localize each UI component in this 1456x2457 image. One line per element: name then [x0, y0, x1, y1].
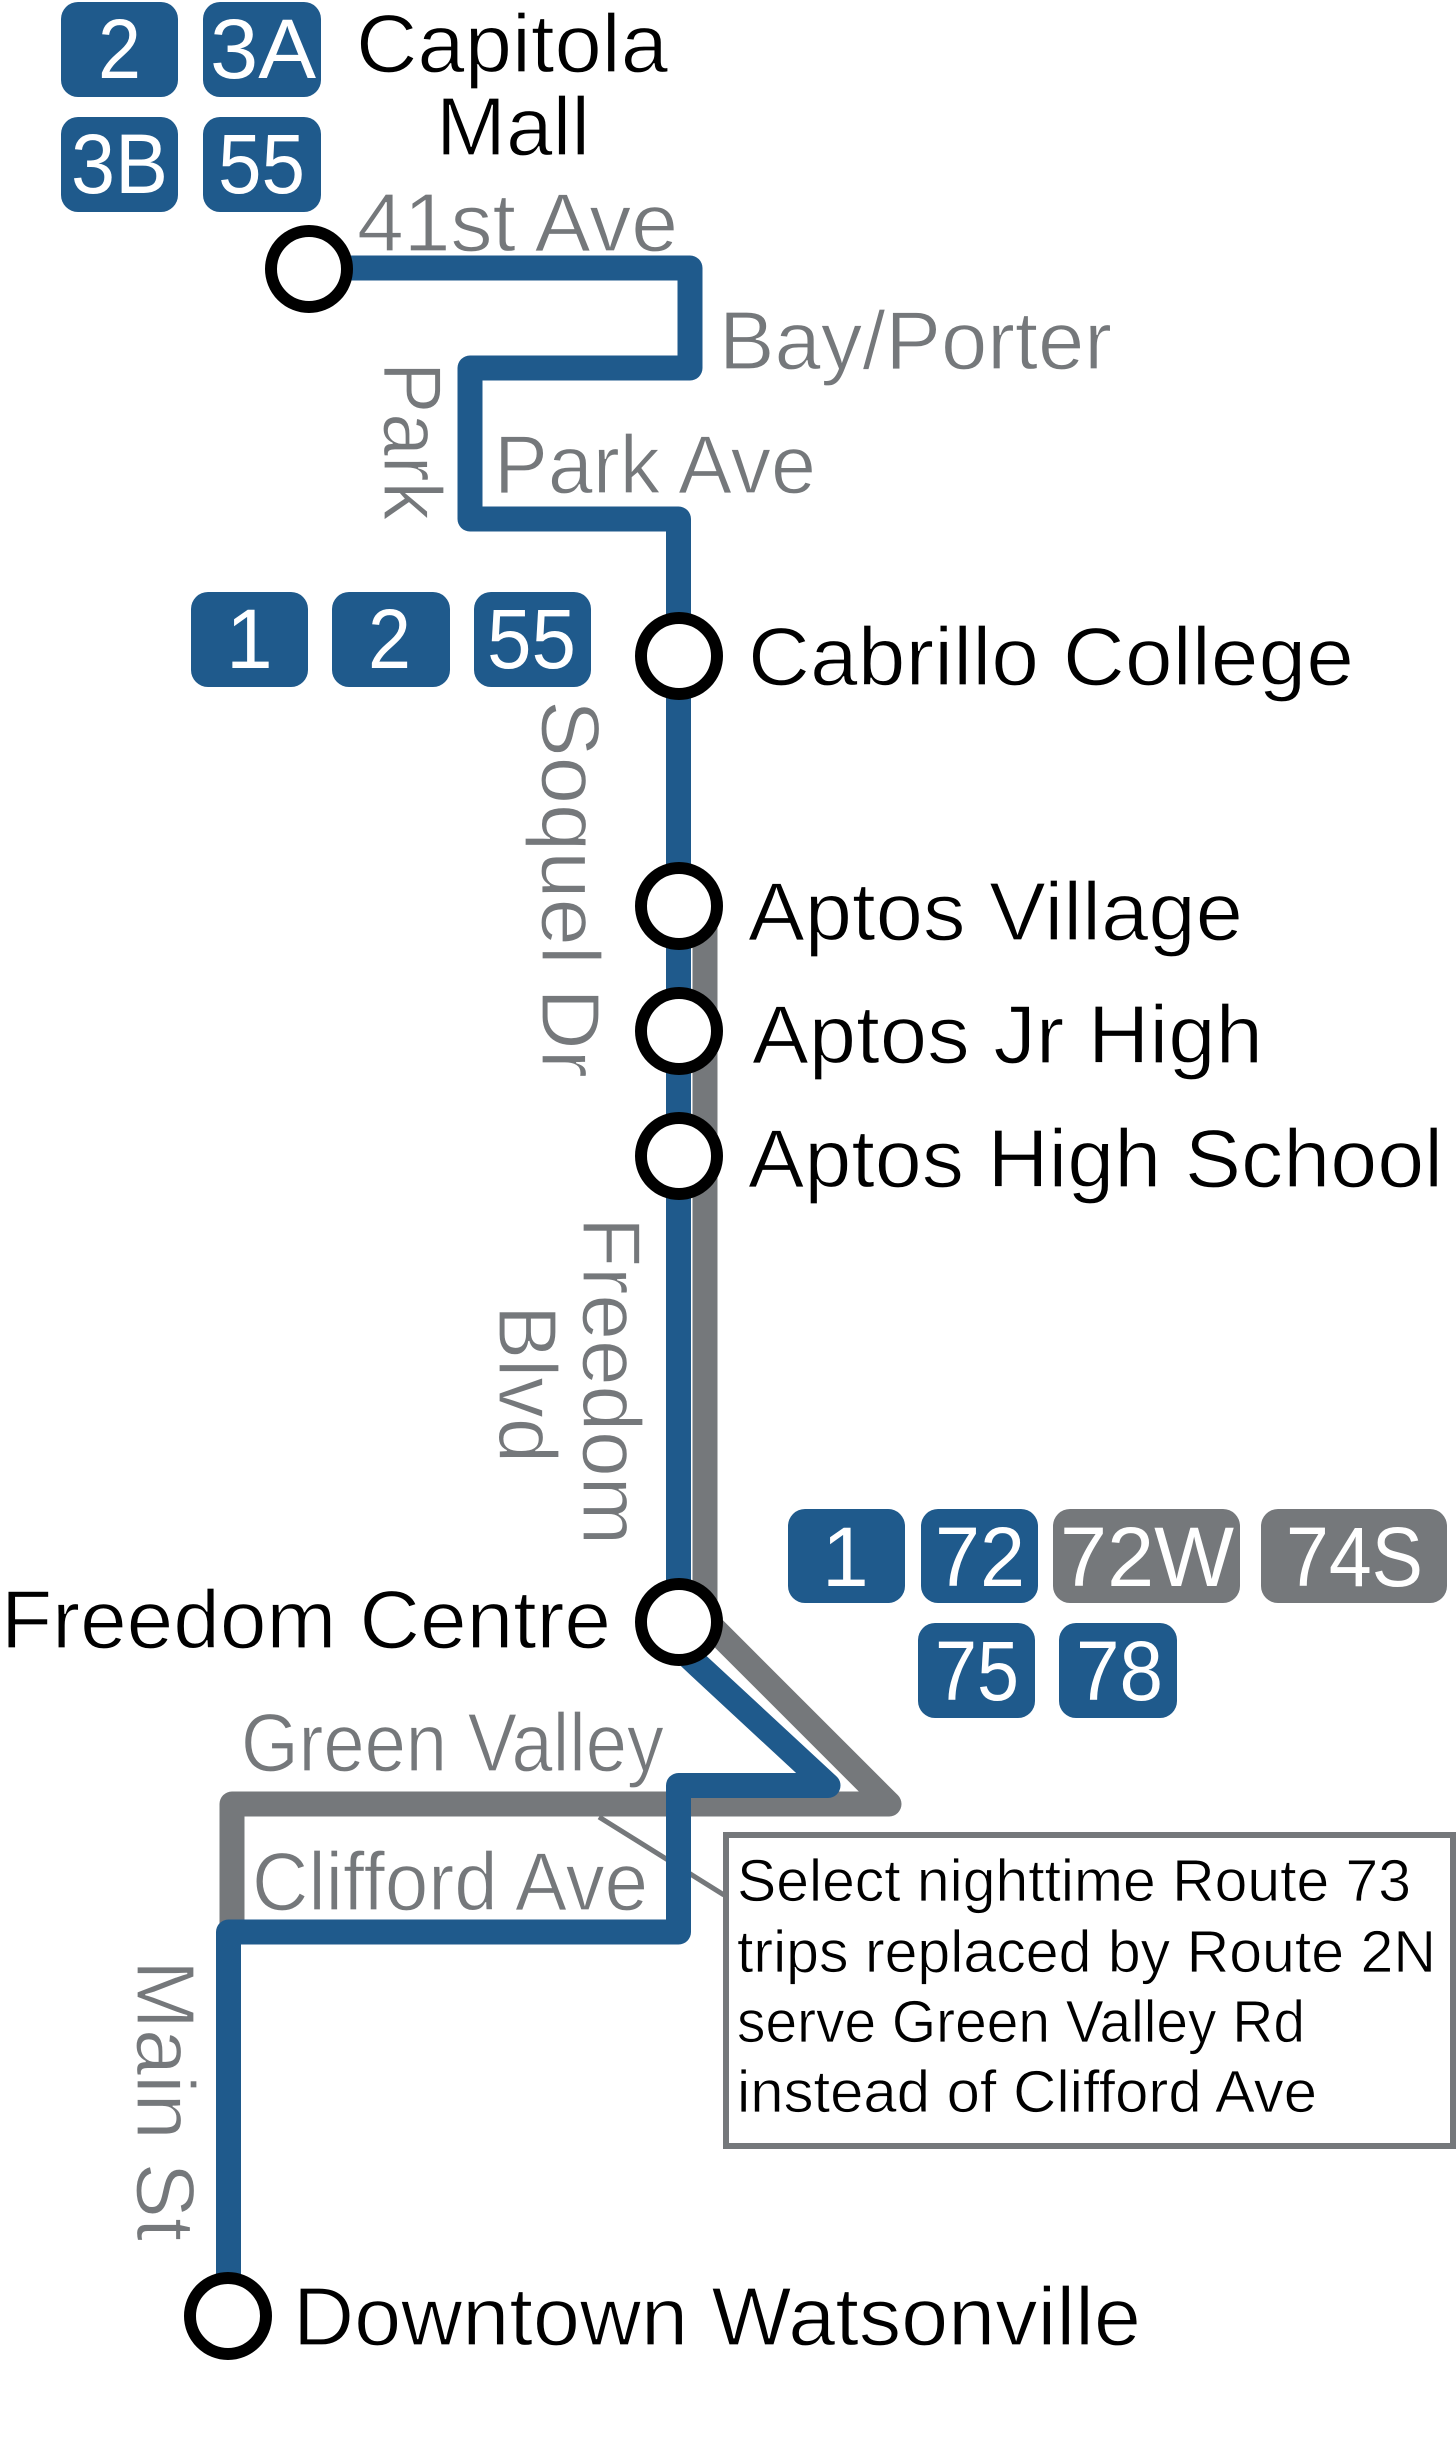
street labels: Bay/Porter — [719, 294, 1112, 387]
street labels: Park — [366, 362, 459, 520]
street labels: Park Ave — [494, 418, 816, 511]
street labels: Green Valley — [241, 1696, 664, 1789]
stop: Cabrillo College: Cabrillo College — [748, 610, 1354, 703]
callout note: serve Green Valley Rd — [737, 1989, 1305, 2055]
stop: Aptos Jr High: Aptos Jr High — [752, 988, 1263, 1081]
route badges: Capitola Mall: 2 — [98, 2, 141, 96]
stop: Aptos High School: Aptos High School — [748, 1112, 1443, 1205]
street labels: Main St — [119, 1960, 212, 2241]
route badges: Cabrillo College — [191, 592, 591, 687]
route badges: Freedom Centre: 74S — [1286, 1510, 1423, 1604]
route badges: Capitola Mall: 3B — [71, 117, 168, 211]
callout note: instead of Clifford Ave — [737, 2059, 1317, 2125]
stop: Aptos Village: Aptos Village — [748, 865, 1243, 958]
blue route line north section — [308, 268, 690, 1622]
route badges: Capitola Mall — [61, 2, 321, 212]
route badges: Cabrillo College: 1 — [226, 592, 273, 686]
route badges: Freedom Centre: 1 — [822, 1510, 869, 1604]
street labels — [119, 176, 1112, 2241]
street labels: 41st Ave — [357, 176, 678, 269]
route badges: Capitola Mall: 3A — [210, 2, 316, 96]
route badges: Cabrillo College: 2 — [368, 592, 411, 686]
street labels: Blvd — [481, 1305, 574, 1463]
stop: Freedom Centre: Freedom Centre — [1, 1573, 611, 1666]
callout note — [726, 1835, 1453, 2146]
stop: Capitola Mall — [271, 0, 669, 307]
gray route line — [232, 906, 889, 1932]
callout note: trips replaced by Route 2N — [737, 1919, 1436, 1985]
blue route line south section — [228, 1647, 828, 2317]
leader line to note — [599, 1817, 724, 1895]
street labels: Freedom — [565, 1217, 658, 1545]
route badges: Cabrillo College: 55 — [487, 592, 576, 686]
route badges: Freedom Centre — [788, 1509, 1447, 1718]
route badges: Freedom Centre: 72W — [1060, 1510, 1234, 1604]
street labels: Clifford Ave — [252, 1835, 648, 1928]
callout note: Select nighttime Route 73 — [737, 1848, 1411, 1914]
street labels: Soquel Dr — [524, 700, 617, 1078]
stop: Downtown Watsonville: Downtown Watsonville — [293, 2270, 1141, 2363]
route badges: Freedom Centre: 72 — [935, 1510, 1025, 1604]
route badges: Freedom Centre: 75 — [935, 1624, 1019, 1718]
stop: Capitola Mall: Mall — [436, 80, 590, 173]
route badges: Capitola Mall: 55 — [218, 117, 305, 211]
route badges: Freedom Centre: 78 — [1076, 1624, 1163, 1718]
